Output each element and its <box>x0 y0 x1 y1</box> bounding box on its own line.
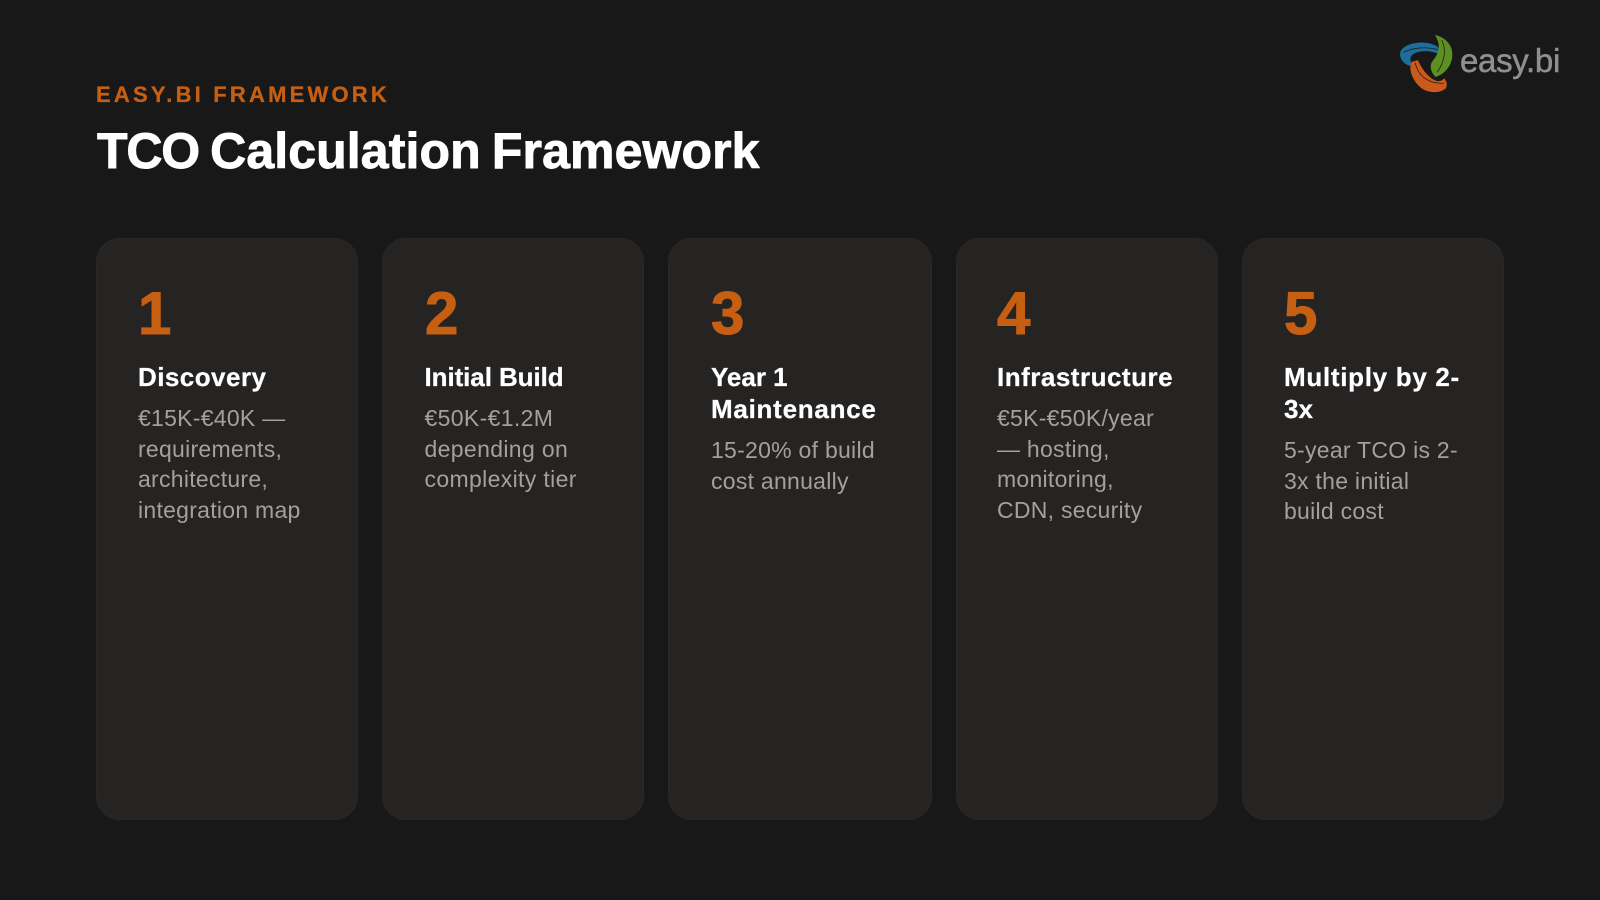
step number: 2 <box>425 280 458 346</box>
step description: €50K-€1.2M <box>424 405 553 431</box>
step description: integration map <box>138 497 301 523</box>
step heading <box>1284 362 1460 424</box>
step description: 15-20% of build <box>711 437 875 463</box>
panel: step 2 initial build <box>382 238 644 820</box>
logo wordmark: easy.bi <box>1460 42 1560 79</box>
step description: 3x the initial <box>1284 468 1409 494</box>
step description: requirements, <box>138 436 282 462</box>
step heading: Infrastructure <box>997 362 1173 392</box>
step description: build cost <box>1284 498 1384 524</box>
step number: 5 <box>1284 280 1317 346</box>
step description: complexity tier <box>424 466 577 492</box>
step description <box>1284 437 1458 524</box>
step heading: Year 1 <box>711 362 788 392</box>
step heading: 3x <box>1284 394 1313 424</box>
title: TCO Calculation Framework <box>97 123 760 179</box>
step heading: Multiply by 2- <box>1284 362 1460 392</box>
step number: 4 <box>997 280 1030 346</box>
step number: 3 <box>711 280 744 346</box>
step description: — hosting, <box>997 436 1110 462</box>
step description: 5-year TCO is 2- <box>1284 437 1458 463</box>
panel: step 5 multiply by 2-3x <box>1242 238 1504 820</box>
icon: logo mark <box>1400 34 1452 92</box>
step description: cost annually <box>711 468 849 494</box>
step description: depending on <box>424 436 568 462</box>
step description <box>138 405 301 523</box>
logo: easy.bi <box>1400 34 1560 92</box>
step description: CDN, security <box>997 497 1142 523</box>
step heading: Discovery <box>138 362 266 392</box>
eyebrow label: EASY.BI FRAMEWORK <box>96 82 390 107</box>
panel: step 3 year 1 maintenance <box>668 238 932 820</box>
step heading: Maintenance <box>711 394 877 424</box>
step description: architecture, <box>138 466 268 492</box>
step description: €5K-€50K/year <box>997 405 1154 431</box>
step description <box>997 405 1154 523</box>
panel: step 1 discovery <box>96 238 358 820</box>
panel: step 4 infrastructure <box>956 238 1218 820</box>
step heading: Initial Build <box>424 362 564 392</box>
step number: 1 <box>138 280 171 346</box>
step description: monitoring, <box>997 466 1114 492</box>
step description <box>711 437 875 494</box>
step description <box>424 405 577 492</box>
step heading <box>711 362 877 424</box>
step description: €15K-€40K — <box>138 405 285 431</box>
